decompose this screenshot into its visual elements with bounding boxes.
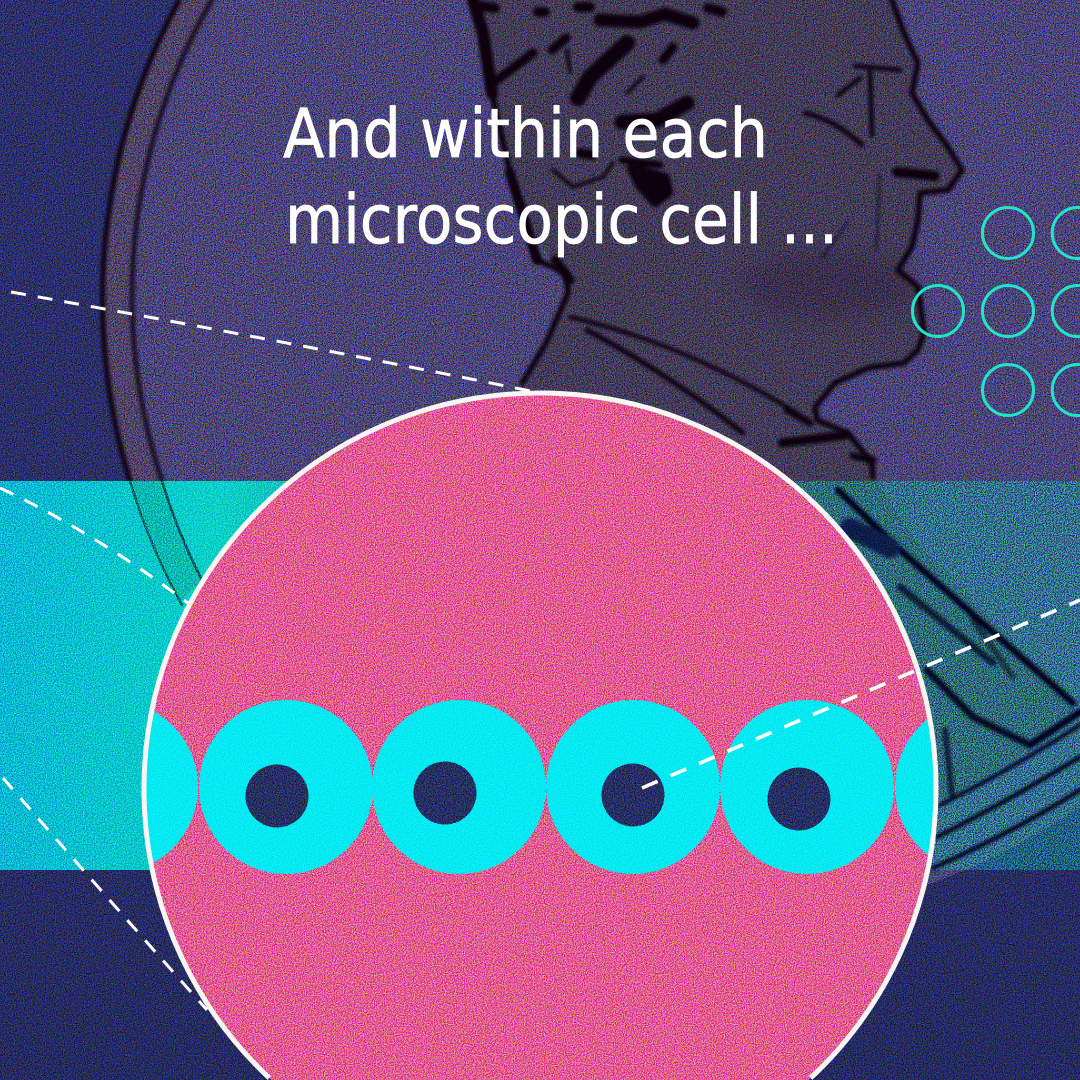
eye and nose engraving — [805, 66, 935, 258]
lens circle: pink field with cells — [146, 396, 934, 1080]
cell 2 — [199, 700, 373, 874]
cell 3 — [372, 700, 546, 874]
dashed line over the lens — [642, 600, 1080, 788]
cell 4 — [546, 700, 720, 874]
coin rim band — [103, 0, 212, 481]
Lincoln silhouette — [472, 0, 1080, 900]
coin: penny with Lincoln profile — [102, 0, 1080, 920]
row of cells — [146, 700, 934, 874]
dashed line top — [11, 292, 540, 393]
heading: microscopic cell ... — [285, 181, 838, 260]
lens outline — [144, 393, 936, 1078]
cell 6 — [895, 719, 934, 855]
pink lens disk — [144, 393, 936, 1080]
cell 1 — [146, 712, 198, 863]
face shading — [740, 250, 920, 320]
dashed line middle left — [0, 488, 188, 603]
dashed line lower left — [3, 778, 207, 1010]
coin disk — [102, 0, 1080, 920]
coin rim outlines — [103, 0, 212, 481]
profile outline — [473, 0, 962, 477]
decorative ring grid — [912, 208, 1080, 416]
cell 5 — [720, 700, 894, 874]
heading: And within each — [283, 95, 768, 174]
hair and ear engraving — [473, 0, 722, 280]
coat engraving through band — [838, 490, 1080, 868]
coin engraving — [103, 0, 962, 481]
horizontal cyan band — [0, 481, 1080, 870]
heading — [283, 95, 838, 260]
dashed connector lines — [0, 292, 540, 1010]
tinted rim area — [130, 481, 202, 600]
collar engraving — [570, 317, 873, 460]
coin rim visible through band — [130, 481, 204, 605]
